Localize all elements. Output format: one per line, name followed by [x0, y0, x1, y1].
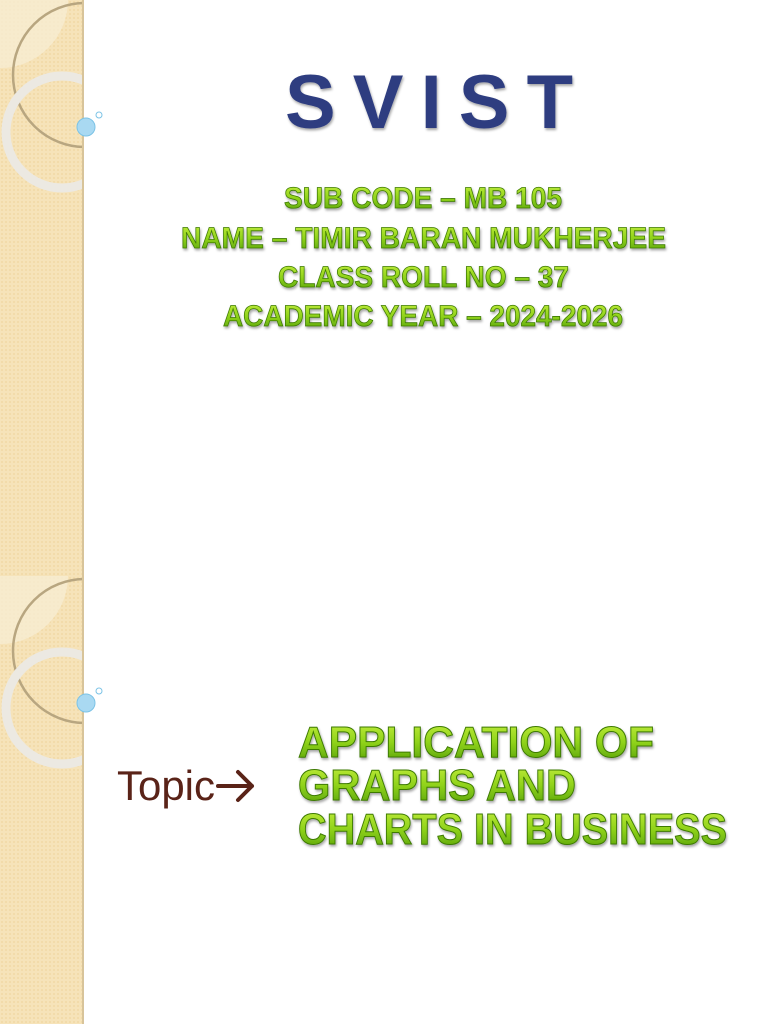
details block	[181, 182, 666, 333]
left decorative panel: slide 2	[0, 576, 84, 1024]
topic title: GRAPHS AND	[298, 761, 576, 810]
name: NAME – TIMIR BARAN MUKHERJEE	[181, 222, 666, 255]
left decorative panel: slide 1	[0, 0, 84, 576]
topic title	[298, 718, 727, 854]
topic label: Topic	[117, 762, 215, 809]
arrow	[218, 772, 252, 800]
academic year: ACADEMIC YEAR – 2024-2026	[223, 300, 623, 333]
title: SVIST: SVIST	[285, 60, 573, 145]
class roll no: CLASS ROLL NO – 37	[278, 261, 569, 294]
topic title: CHARTS IN BUSINESS	[298, 805, 727, 854]
topic title: APPLICATION OF	[298, 718, 654, 767]
sub code: SUB CODE – MB 105	[284, 182, 562, 215]
icon: bubble slide 2	[77, 688, 102, 712]
icon: bubble slide 1	[77, 112, 102, 136]
